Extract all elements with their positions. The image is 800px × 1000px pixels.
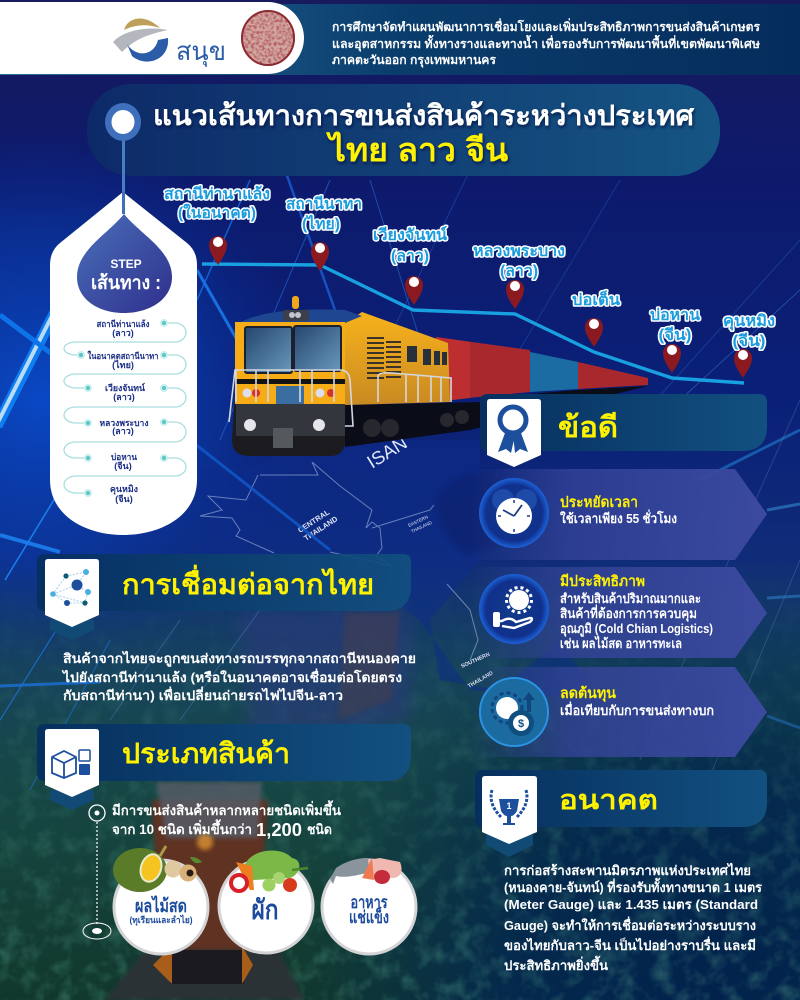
station labels: บ่อหาน <box>650 307 700 324</box>
advantage: lower cost <box>470 667 767 757</box>
goods intro: 1,200 <box>256 820 302 840</box>
advantage: efficiency: เช่น ผลไม้สด อาหารทะเล <box>560 635 682 651</box>
step dots <box>78 320 167 496</box>
section: advantages header <box>480 394 767 467</box>
logo: swoosh <box>113 18 168 62</box>
map of Thailand: THAILAND <box>302 514 340 543</box>
advantage: efficiency: สำหรับสินค้าปริมาณมากและ <box>560 591 701 606</box>
section: goods types: ประเภทสินค้า <box>122 738 290 769</box>
location pins <box>209 236 752 378</box>
title pill <box>87 84 720 195</box>
vegetables <box>231 851 308 892</box>
train <box>229 296 648 456</box>
map of Thailand <box>200 432 600 700</box>
advantage: efficiency: อุณภูมิ (Cold Chian Logistics) <box>560 621 713 637</box>
goods intro: ชนิด <box>307 822 332 837</box>
step labels: (ไทย) <box>112 359 134 370</box>
future text: ประสิทธิภาพยิ่งขึ้น <box>504 955 608 973</box>
advantage: saves time: ประหยัดเวลา <box>560 495 638 511</box>
title: แนวเส้นทางการขนส่งสินค้าระหว่างประเทศ <box>153 100 695 131</box>
section: future: อนาคต <box>559 785 658 815</box>
top header bar <box>0 2 800 75</box>
project description: การศึกษาจัดทำแผนพัฒนาการเชื่อมโยงและเพิ่มประสิทธิภาพการขนส่งสินค้าเกษตร <box>332 18 761 34</box>
advantage: lower cost: เมื่อเทียบกับการขนส่งทางบก <box>560 701 714 718</box>
undercarriage <box>345 386 648 447</box>
advantage: efficiency <box>470 567 767 658</box>
map of Thailand: THAILAND <box>410 520 433 534</box>
station labels: บ่อเต็น <box>572 289 620 309</box>
connection text: ไปยังสถานีท่านาแล้ง (หรือในอนาคตอาจเชื่อมต่อโดยตรง <box>61 668 402 685</box>
connection text: กับสถานีท่านา) เพื่อเปลี่ยนถ่ายรถไฟไปจีน-ลาว <box>63 686 343 703</box>
goods: frozen food: แช่แข็ง <box>349 905 389 927</box>
step drop: STEP <box>110 257 142 271</box>
goods: vegetables <box>219 851 313 953</box>
seal <box>241 10 295 66</box>
connection text: สินค้าจากไทยจะถูกขนส่งทางรถบรรทุกจากสถานีหนองคาย <box>63 650 416 667</box>
station labels: (ลาว) <box>391 248 429 265</box>
project description <box>332 18 761 68</box>
step labels: (จีน) <box>115 494 133 504</box>
step labels <box>88 319 158 504</box>
future text: (หนองคาย-จันทน์) ที่รองรับทั้งทางขนาด 1 เมตร <box>504 877 762 895</box>
badge: trophy <box>482 776 537 844</box>
advantage: lower cost: ลดต้นทุน <box>560 685 616 702</box>
step labels: (ลาว) <box>113 392 135 402</box>
route step capsule <box>50 192 197 535</box>
station labels: (ไทย) <box>302 214 340 233</box>
fish and meat <box>330 858 402 884</box>
icon: clock <box>479 478 549 548</box>
goods: fruit: ผลไม้สด <box>135 895 187 916</box>
goods: frozen food: อาหาร <box>350 893 388 912</box>
future text <box>504 862 762 973</box>
step labels: (ลาว) <box>112 328 134 338</box>
map of Thailand: THAILAND <box>467 670 494 690</box>
station labels: คุนหมิง <box>723 312 775 331</box>
station labels: เวียงจันทน์ <box>373 226 447 244</box>
containers <box>436 337 648 402</box>
logo: wordmark: สนุข <box>176 36 226 67</box>
step labels: เวียงจันทน์ <box>105 382 146 393</box>
section: connection from Thailand: การเชื่อมต่อจากไทย <box>122 564 374 600</box>
goods: fruit <box>113 846 208 954</box>
route line <box>202 264 744 383</box>
station labels: (จีน) <box>658 326 692 344</box>
serpentine <box>64 323 186 493</box>
map of Thailand: SOUTHERN <box>460 652 491 670</box>
photo: train on forest track <box>105 612 400 1000</box>
durian and longan <box>113 846 202 892</box>
icon: gear in hand <box>479 574 549 644</box>
step labels: หลวงพระบาง <box>100 418 148 428</box>
railings <box>229 370 451 426</box>
title: ไทย ลาว จีน <box>326 131 508 168</box>
step labels: สถานีท่านาแล้ง <box>96 319 150 329</box>
section: goods types <box>37 724 411 810</box>
step labels: คุนหมิง <box>110 484 138 495</box>
icon: coin and clock <box>479 677 549 747</box>
step drop: เส้นทาง : <box>91 272 161 294</box>
station labels: (ในอนาคต) <box>178 203 256 222</box>
goods intro: จาก 10 ชนิด เพิ่มขึ้นกว่า <box>112 819 252 837</box>
goods intro <box>83 800 342 939</box>
advantage: efficiency: มีประสิทธิภาพ <box>560 573 645 590</box>
future text: ของไทยกับลาว-จีน เป็นไปอย่างราบรื่น และมี <box>504 936 756 953</box>
map of Thailand: CENTRAL <box>296 507 331 535</box>
step labels: (จีน) <box>114 461 132 471</box>
map of Thailand: ISAN <box>363 432 411 472</box>
badge: network <box>45 559 99 627</box>
station labels: (จีน) <box>732 332 766 350</box>
badge: trophy: 1 <box>506 801 512 811</box>
step drop <box>77 214 172 313</box>
step labels: บ่อหาน <box>111 452 138 462</box>
badge: boxes <box>45 729 99 797</box>
headlamps <box>242 388 335 398</box>
goods: fruit: (ทุเรียนและลำไย) <box>130 914 193 926</box>
section: future <box>475 770 767 857</box>
station labels: (ลาว) <box>500 263 538 280</box>
future text: (Meter Gauge) และ 1.435 เมตร (Standard <box>504 897 758 912</box>
connection text <box>61 650 416 703</box>
future text: Gauge) จะทำให้การเชื่อมต่อระหว่างระบบราง <box>504 916 756 933</box>
title <box>153 100 695 168</box>
advantage: saves time: ใช้เวลาเพียง 55 ชั่วโมง <box>560 509 677 526</box>
goods: vegetables: ผัก <box>252 895 278 925</box>
heading: ข้อดี <box>558 412 618 444</box>
windows <box>245 326 447 373</box>
step labels: ในอนาคตสถานีนาทา <box>88 350 158 361</box>
map of Thailand: EASTERN <box>407 514 429 528</box>
timeline marker <box>83 805 111 939</box>
future text: การก่อสร้างสะพานมิตรภาพแห่งประเทศไทย <box>504 862 751 878</box>
station labels <box>164 185 775 350</box>
logo panel <box>0 2 304 74</box>
vents <box>367 337 401 379</box>
badge: ribbon <box>487 399 541 467</box>
section: connection from Thailand <box>37 554 411 640</box>
station labels: สถานีนาทา <box>286 195 362 213</box>
station labels: หลวงพระบาง <box>473 243 565 260</box>
station labels: สถานีท่านาแล้ง <box>164 185 270 203</box>
icon: coin and clock: $ <box>518 718 524 730</box>
advantage: efficiency: สินค้าที่ต้องการการควบคุม <box>560 604 697 622</box>
locomotive body <box>229 296 451 456</box>
title marker <box>105 103 141 195</box>
step labels: (ลาว) <box>112 426 134 436</box>
project description: และอุตสาหกรรม ทั้งทางรางและทางน้ำ เพื่อรองรับการพัฒนาพื้นที่เขตพัฒนาพิเศษ <box>332 34 760 52</box>
advantage: saves time <box>470 469 767 560</box>
project description: ภาคตะวันออก กรุงเทพมหานคร <box>332 53 497 68</box>
goods intro: มีการขนส่งสินค้าหลากหลายชนิดเพิ่มขึ้น <box>112 800 342 818</box>
goods: frozen food <box>322 858 416 954</box>
